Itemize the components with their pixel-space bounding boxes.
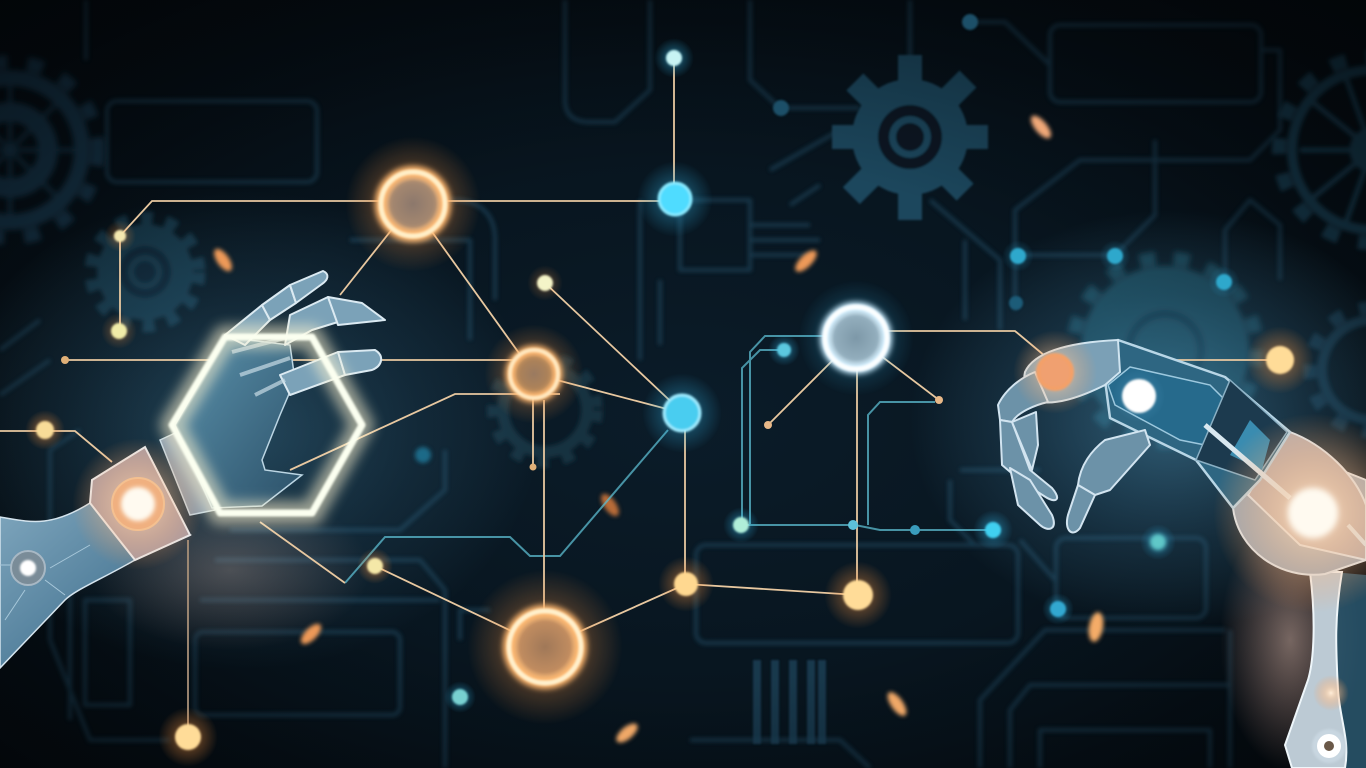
forearm panel bbox=[1108, 367, 1225, 445]
forearm light core bbox=[1122, 379, 1156, 413]
node: white ring bbox=[798, 280, 914, 396]
warm haze under left cuff bbox=[90, 490, 370, 650]
thumb bbox=[1078, 430, 1150, 495]
shoulder glow bbox=[1213, 413, 1366, 613]
forearm light bbox=[1113, 370, 1165, 422]
node: cyan middle bbox=[642, 373, 722, 453]
gear: upper left bbox=[91, 218, 199, 326]
finger joints detail bbox=[232, 338, 290, 395]
gear: right middle bbox=[1073, 258, 1257, 442]
curled fingers bbox=[998, 372, 1150, 532]
elbow lower joint bbox=[1313, 675, 1349, 711]
gear: right edge lower bbox=[1310, 308, 1366, 432]
palm bbox=[175, 337, 302, 508]
forearm bbox=[1105, 340, 1290, 508]
fingers bbox=[225, 271, 385, 395]
lower joint bbox=[1312, 729, 1346, 763]
gear: left edge bbox=[0, 62, 98, 238]
node: cyan top bbox=[637, 161, 713, 237]
shoulder core bbox=[1288, 488, 1338, 538]
forearm dark section bbox=[1196, 380, 1287, 480]
gear: right edge upper bbox=[1279, 57, 1366, 243]
left arm haze bbox=[0, 190, 540, 670]
gear: upper centre bbox=[832, 55, 988, 220]
node: middle amber ring bbox=[484, 324, 584, 424]
elbow shell bbox=[1248, 432, 1366, 560]
small joint bbox=[11, 551, 45, 585]
forearm bbox=[0, 503, 190, 668]
cuff bbox=[90, 447, 190, 560]
shoulder bbox=[1233, 450, 1366, 575]
right robotic arm bbox=[998, 330, 1366, 768]
glowing hexagon bbox=[172, 337, 362, 513]
lower arm bbox=[1285, 570, 1366, 768]
right arm haze bbox=[910, 210, 1366, 630]
wrist link bbox=[160, 410, 225, 515]
left robotic arm bbox=[0, 271, 385, 668]
node: bottom amber ring bbox=[467, 569, 623, 725]
small cyan nodes bbox=[415, 14, 1240, 713]
wrist orange glow bbox=[1013, 330, 1097, 414]
gear: centre faint bbox=[493, 358, 597, 462]
warm haze beside right arm bbox=[1220, 510, 1360, 768]
wrist orange core bbox=[1038, 355, 1072, 389]
cyan network traces bbox=[345, 336, 993, 583]
node: top amber ring bbox=[345, 136, 481, 272]
elbow joint core bbox=[112, 478, 164, 530]
floating amber particles bbox=[211, 112, 1105, 746]
hand knuckle shell bbox=[1024, 340, 1120, 403]
elbow joint glow bbox=[72, 438, 204, 570]
ventilation bars bbox=[753, 660, 826, 744]
